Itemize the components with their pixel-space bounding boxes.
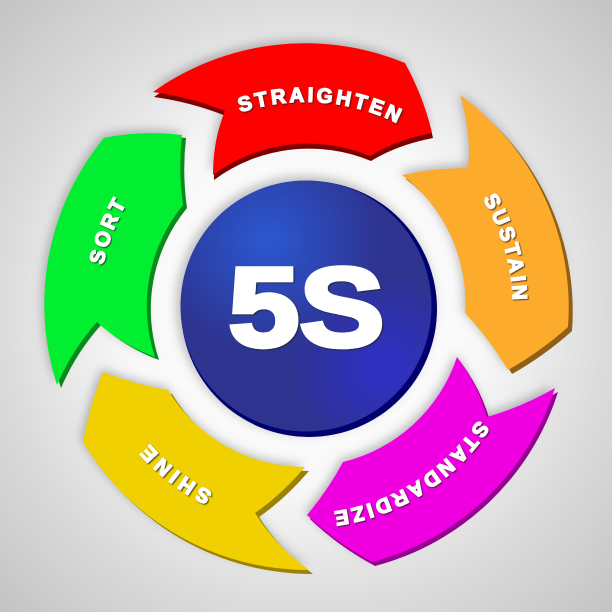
center circle [176, 176, 437, 437]
center label: 5S: 5S [228, 245, 385, 370]
segment: shine [77, 366, 313, 574]
segment: standardize: STANDARDIZE [334, 422, 490, 528]
segment: sustain [400, 92, 573, 374]
segment: straighten [152, 35, 434, 180]
segment: standardize [302, 354, 558, 566]
segment: sort: SORT [90, 196, 126, 266]
segment: straighten: STRAIGHTEN [238, 87, 404, 125]
segment: sustain: SUSTAIN [484, 194, 530, 302]
segment: shine: SHINE [139, 444, 213, 506]
segment: sort [37, 125, 187, 388]
